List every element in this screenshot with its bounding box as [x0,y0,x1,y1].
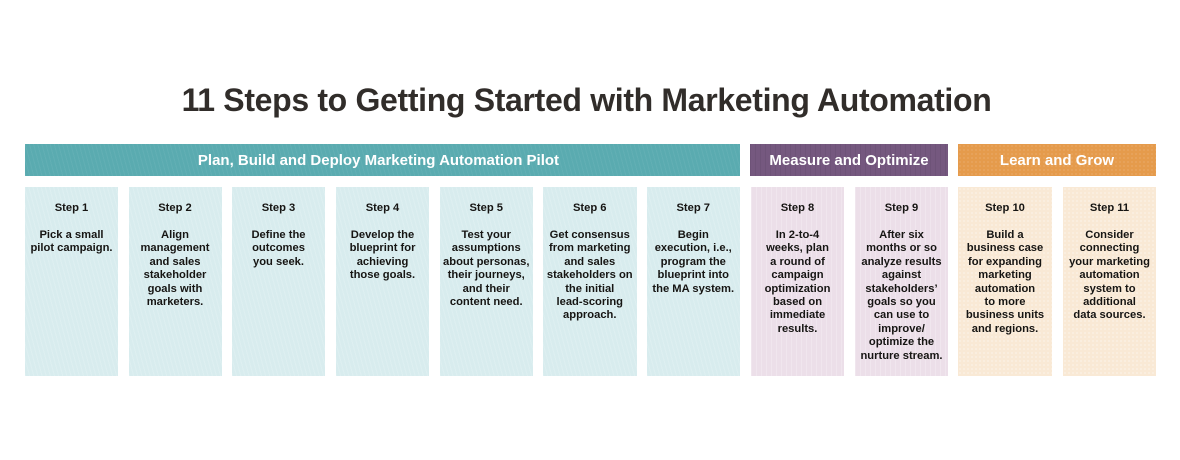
panel: step 6: the initial [565,283,614,295]
panel: step 9 [855,187,948,376]
panel: step 1: Pick a small [39,229,104,241]
panel: step 10: Step 10 [985,202,1025,214]
panel: step 10: and regions. [972,323,1038,335]
panel: step 5: Step 5 [469,202,503,214]
panel: step 7: Step 7 [676,202,710,214]
panel: step 6: stakeholders on [547,269,633,281]
panel: step 1 [25,187,118,376]
panel: step 5: Test your [461,229,511,241]
panel: step 11: additional [1083,296,1136,308]
panel: step 10: business units [966,309,1044,321]
panel: step 4: achieving [357,256,408,268]
panel: step 5: and their [463,283,510,295]
panel: step 3: Step 3 [262,202,295,214]
panel: step 2: marketers. [147,296,203,308]
panel: step 2 [128,187,222,376]
panel: step 2: goals with [148,283,202,295]
panel: step 8: based on [773,296,822,308]
panel: step 2: Step 2 [158,202,192,214]
panel: step 7 [646,187,740,376]
panel: step 9: improve/ [878,323,925,335]
panel: step 9: optimize the [869,336,934,348]
panel: step 4: those goals. [350,269,415,281]
panel: step 9: Step 9 [885,202,918,214]
panel: step 9: goals so you [867,296,936,308]
panel: step 8: immediate [770,309,825,321]
panel: step 8: campaign [771,269,824,281]
panel: step 5 [440,187,533,376]
panel: step 5: about personas, [443,256,529,268]
panel: step 5: assumptions [452,242,521,254]
panel: step 2: stakeholder [144,269,206,281]
panel: step 3: outcomes [252,242,305,254]
panel: step 10 [958,187,1052,376]
panel: step 11: automation [1079,269,1140,281]
panel: step 6: lead-scoring [556,296,623,308]
panel: step 5: content need. [450,296,523,308]
panel: step 1: Step 1 [55,202,88,214]
panel: step 7: the MA system. [652,283,734,295]
panel: step 8 [751,187,844,376]
panel: step 9: After six [879,229,924,241]
header: Plan, Build and Deploy: Plan, Build and Deploy Marketing Automation Pilot [198,152,559,169]
panel: step 3 [232,187,325,376]
panel: step 5: their journeys, [448,269,525,281]
panel: step 10: Build a [986,229,1024,241]
panel: step 7: execution, i.e., [655,242,732,254]
panel: step 3: you seek. [253,256,304,268]
panel: step 8: results. [778,323,817,335]
header: Measure and Optimize: Measure and Optimize [769,152,929,169]
panel: step 8: Step 8 [781,202,814,214]
panel: step 2: Align [161,229,189,241]
panel: step 9: nurture stream. [860,350,943,362]
panel: step 2: and sales [150,256,200,268]
panel: step 8: In 2-to-4 [776,229,819,241]
panel: step 7: blueprint into [658,269,729,281]
panel: step 8: a round of [770,256,825,268]
panel: step 10: to more [984,296,1026,308]
panel: step 7: program the [661,256,726,268]
panel: step 10: marketing [978,269,1032,281]
panel: step 10: automation [975,283,1035,295]
panel: step 9: can use to [874,309,929,321]
panel: step 10: for expanding [968,256,1042,268]
panel: step 11: data sources. [1073,309,1146,321]
panel: step 6: and sales [564,256,615,268]
header: Plan, Build and Deploy [25,144,740,176]
panel: step 8: optimization [765,283,830,295]
panel: step 6: from marketing [549,242,630,254]
panel: step 6 [543,187,636,376]
panel: step 6: approach. [563,309,616,321]
panel: step 7: Begin [678,229,709,241]
panel: step 1: pilot campaign. [30,242,113,254]
panel: step 6: Step 6 [573,202,607,214]
panel: step 11: Consider [1085,229,1134,241]
panel: step 9: months or so [866,242,937,254]
panel: step 10: business case [967,242,1043,254]
title: 11 Steps to Getting Started with Marketing Automation [182,82,991,118]
header: Measure and Optimize [750,144,948,176]
panel: step 4 [336,187,429,376]
panel: step 11: your marketing [1069,256,1150,268]
panel: step 9: stakeholders’ [865,283,938,295]
header: Learn and Grow: Learn and Grow [1000,152,1114,169]
panel: step 11: connecting [1080,242,1139,254]
panel: step 4: blueprint for [350,242,415,254]
panel: step 4: Develop the [351,229,414,241]
panel: step 11 [1063,187,1156,376]
header: Learn and Grow [958,144,1156,176]
panel: step 6: Get consensus [550,229,630,241]
panel: step 11: system to [1083,283,1136,295]
panel: step 8: weeks, plan [766,242,829,254]
panel: step 3: Define the [251,229,306,241]
panel: step 2: management [140,242,210,254]
panel: step 9: against [882,269,921,281]
panel: step 9: analyze results [861,256,942,268]
panel: step 11: Step 11 [1090,202,1129,214]
panel: step 4: Step 4 [366,202,399,214]
